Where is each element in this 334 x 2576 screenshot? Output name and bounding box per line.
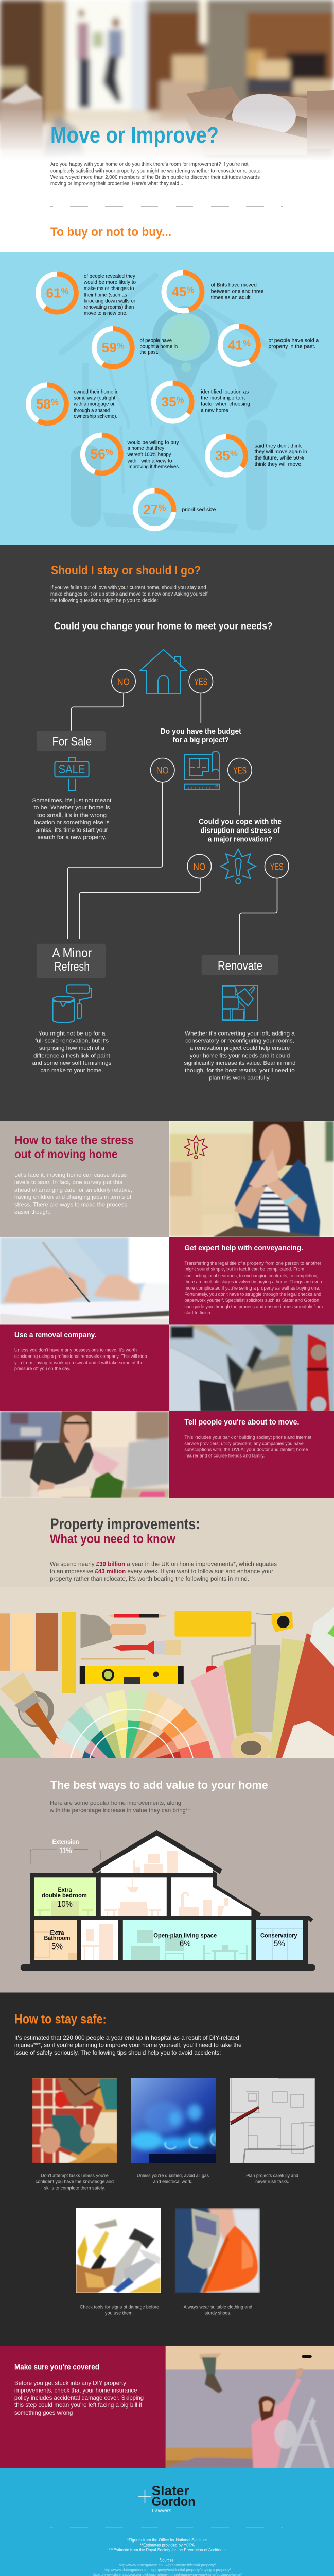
question 2: for a big project? xyxy=(173,736,229,744)
stat: 45%: times as an adult xyxy=(211,295,251,301)
safety intro text: injuries***, so if you're planning to improve your home yourself, you'll need to take the xyxy=(14,2042,242,2049)
renovate text xyxy=(184,1030,295,1081)
stat: 61%: % xyxy=(61,286,69,296)
scraper xyxy=(80,1614,146,1648)
footnotes xyxy=(109,2538,225,2562)
stress intro text: levels to soar. In fact, one survey put this xyxy=(14,1180,122,1186)
panel: get expert help: there are multiple stages involved in buying a home. Things are even xyxy=(184,1279,322,1285)
label: extra bathroom xyxy=(44,1930,70,1952)
label: extra bathroom: 5% xyxy=(51,1942,63,1952)
intro paragraph: completely satisfied with your property, you might be wondering whether to renovate or relocate. xyxy=(50,168,262,174)
for sale text: to be. Whether your home is xyxy=(34,805,110,811)
stress intro text: easier though. xyxy=(14,1209,50,1215)
for sale text: amiss, it's time to start your xyxy=(36,827,108,833)
stat: 61%: would be more likely to xyxy=(83,280,136,285)
furniture silhouettes xyxy=(82,1851,228,1960)
panel: use a removal company: you from having to work up a sweat and it will take some of the xyxy=(14,1360,143,1366)
button: yes 1 xyxy=(189,669,213,693)
value intro text: with the percentage increase in value they can bring**. xyxy=(49,1807,192,1814)
result: a minor refresh: Refresh xyxy=(54,960,90,974)
intro paragraph: We surveyed more than 2,000 members of the British public to discover their attitudes towards xyxy=(50,174,260,180)
label: extra double bedroom: 10% xyxy=(57,1899,73,1909)
photo: row of vans xyxy=(169,1324,334,1412)
stat: 59%: % xyxy=(117,341,125,350)
extension bracket and label xyxy=(30,1838,100,1871)
result: for sale xyxy=(37,731,106,751)
panel: use a removal company: Unless you don't have many possessions to move, it's worth xyxy=(14,1348,137,1353)
result: for sale: For Sale xyxy=(52,735,92,749)
panel: tell people you're about to move: subscriptions with; the DVLA; your doctor and dentist; home xyxy=(184,1447,308,1453)
icon: blueprint xyxy=(185,751,219,790)
photo: man with router xyxy=(32,2078,117,2163)
label: conservatory: Conservatory xyxy=(260,1933,297,1939)
background tools illustration xyxy=(62,276,283,534)
photo: leg through ceiling xyxy=(166,2346,334,2468)
ground floor small room xyxy=(81,1920,118,1960)
icon: stress star xyxy=(221,849,256,884)
conservatory room xyxy=(256,1920,303,1960)
stat: 35% location: % xyxy=(177,395,184,405)
result: a minor refresh xyxy=(37,944,106,978)
renovate text: though, for the best results, you'll need to xyxy=(185,1067,295,1074)
stat: 35% location: 35 xyxy=(162,394,177,410)
stat: 59%: bought a home in xyxy=(140,344,178,349)
label: extra double bedroom: double bedroom xyxy=(42,1893,87,1899)
stat: 56%: would be willing to buy xyxy=(127,439,179,445)
panel: property improvements xyxy=(0,1498,334,1758)
panel: get expert help: can guide you through the process and ensure it runs smoothly from xyxy=(184,1304,323,1310)
label: extra bathroom: Bathroom xyxy=(44,1935,70,1941)
panel: make sure you're covered: this step could mean you're left facing a big bill if xyxy=(14,2401,143,2409)
panel: make sure you're covered: policy includes accidental damage cover. Skipping xyxy=(14,2394,144,2401)
caption: plan projects: never rush tasks. xyxy=(255,2179,289,2184)
icon: renovating wall xyxy=(222,986,257,1020)
safety intro text: issue of safety seriously. The following tips should help you to avoid accidents: xyxy=(14,2049,221,2056)
stat: 27%: prioritised size. xyxy=(182,507,217,513)
stat: 41%: of people have sold a xyxy=(269,338,319,343)
stat: 35% move again: think they will move. xyxy=(255,462,303,467)
panel: get expert help: Fortunately, you don't have to struggle through the legal checks and xyxy=(184,1292,321,1297)
panel: best ways to add value xyxy=(0,1758,334,1993)
stat: 35% move again: they will move again in xyxy=(255,449,307,455)
button: yes 3: YES xyxy=(270,861,284,872)
safety intro text xyxy=(14,2034,242,2056)
label: extra bathroom: Extra xyxy=(50,1930,64,1936)
footnotes: **Estimates provided by YOPA xyxy=(140,2543,195,2548)
improvement spend text xyxy=(50,1562,277,1582)
minor refresh text: difference a fresh lick of paint xyxy=(33,1053,110,1059)
stat: 27%: 27 xyxy=(143,502,158,517)
stat: 45% xyxy=(164,273,264,311)
minor refresh text: surprising how much of a xyxy=(39,1045,105,1052)
icon: crimson stress star xyxy=(184,1136,208,1159)
colour samples xyxy=(0,1613,58,1671)
question 3: Could you cope with the xyxy=(199,817,282,826)
stat: 59%: 59 xyxy=(102,340,117,355)
source list xyxy=(50,2563,285,2576)
panel: make sure you're covered: Before you get stuck into any DIY property xyxy=(14,2379,126,2386)
stat: 56%: % xyxy=(106,447,113,457)
extra bathroom room xyxy=(34,1920,77,1960)
value intro text: Here are some popular home improvements, along xyxy=(50,1800,181,1806)
stress intro text: having children and changing jobs in terms of xyxy=(14,1194,132,1200)
stat: 58%: ownership scheme). xyxy=(74,414,117,419)
panel: use a removal company: pressure off you on the day. xyxy=(14,1366,71,1372)
logo: Slater and Gordon Lawyers: Lawyers xyxy=(152,2508,171,2514)
heading: The best ways to add value to your home xyxy=(50,1778,268,1791)
extension bracket and label: Extension xyxy=(52,1838,79,1845)
stat: 56% xyxy=(83,435,180,473)
caption: gas and electrical xyxy=(137,2173,209,2184)
for sale text xyxy=(32,798,111,841)
house cross-section diagram xyxy=(21,1831,315,1971)
improvement spend text: property rather than relocate, it's worth bearing the following points in mind. xyxy=(50,1576,249,1582)
paint brush xyxy=(112,1640,181,1655)
stat: 41% xyxy=(220,326,319,364)
footnotes: *Figures from the Office for National Statistics xyxy=(127,2538,207,2543)
button: no 1: NO xyxy=(117,677,130,687)
question 2 xyxy=(161,727,241,744)
photo: floor plan with pencil xyxy=(230,2078,315,2163)
intro paragraph: Are you happy with your home or do you think there's room for improvement? If you're not xyxy=(50,161,249,167)
stat: 41%: property in the past. xyxy=(269,344,315,349)
for sale text: Sometimes, it's just not meant xyxy=(32,798,111,804)
stat: 61%: of people revealed they xyxy=(84,274,135,279)
caption: suitable clothing xyxy=(184,2304,252,2316)
panel: tell people you're about to move: Tell people you're about to move. xyxy=(184,1418,299,1427)
for sale text: too small, it's in the wrong xyxy=(37,812,107,819)
improvement spend text: We spend nearly £30 billion a year in the UK on home improvements*, which equates xyxy=(50,1562,277,1568)
intro paragraph xyxy=(50,161,262,187)
panel: make sure you're covered: improvements, check that your home insurance xyxy=(14,2387,137,2394)
button: yes 1: YES xyxy=(194,677,207,687)
label: extra double bedroom: Extra xyxy=(58,1887,72,1893)
panel: tell people you're about to move: This includes your bank or building society; phone and internet xyxy=(184,1435,311,1440)
stat: 58%: owned their home in xyxy=(74,389,118,395)
panel: tell people you're about to move: service providers; utility providers; any companies you have xyxy=(184,1441,304,1447)
caption: knowledge and skills: skills to complete them safely. xyxy=(44,2185,105,2191)
panel: get expert help xyxy=(169,1237,334,1324)
safety intro text: It's estimated that 220,000 people a year end up in hospital as a result of DIY-related xyxy=(14,2034,239,2041)
panel: get expert help: Transferring the legal title of a property from one person to another xyxy=(184,1261,322,1266)
house structure xyxy=(21,1831,315,1971)
button: no 2 xyxy=(151,758,174,782)
moving box, left xyxy=(0,84,43,149)
subheading: what you need to know: What you need to know xyxy=(50,1532,175,1546)
caption: plan projects: Plan projects carefully and xyxy=(246,2173,298,2178)
stat: 61%: move to a new one. xyxy=(84,311,127,316)
logo: Slater and Gordon Lawyers xyxy=(138,2484,196,2514)
minor refresh text: You might not be up for a xyxy=(38,1030,106,1037)
intro paragraph: moving or improving their properties. Here's what they said... xyxy=(50,180,183,187)
open-plan room xyxy=(123,1920,251,1960)
stat: 61%: make major changes to xyxy=(84,286,134,292)
caption: gas and electrical: and electrical work. xyxy=(153,2179,192,2184)
caption: gas and electrical: Unless you're qualified, avoid all gas xyxy=(137,2173,209,2178)
icon: house xyxy=(140,650,186,694)
caption: knowledge and skills: Don't attempt tasks unless you're xyxy=(41,2173,109,2178)
renovate text: plan this work carefully. xyxy=(209,1075,271,1081)
button: yes 3 xyxy=(265,854,289,878)
stat: 35% location: identified location as xyxy=(201,389,249,395)
photo: assorted tools xyxy=(76,2208,161,2293)
stat: 45%: 45 xyxy=(171,284,186,299)
label: open-plan living space: Open-plan living space xyxy=(153,1933,217,1939)
panel: tell people you're about to move xyxy=(169,1411,334,1498)
logo: Slater and Gordon Lawyers: Slater xyxy=(152,2484,189,2498)
stress intro text: ahead of arranging care for an elderly relative, xyxy=(14,1187,132,1193)
minor refresh text: full-scale renovation, but it's xyxy=(35,1038,109,1044)
panel: get expert help: paperwork yourself. Specialist solicitors such as Slater and Gordon xyxy=(184,1298,319,1303)
stat: 45%: between one and three xyxy=(211,289,264,295)
panel: get expert help: start to finish. xyxy=(184,1310,212,1316)
label: extra double bedroom xyxy=(42,1887,87,1909)
result: a minor refresh: A Minor xyxy=(52,946,92,960)
stat: 45%: of Brits have moved xyxy=(211,283,257,289)
panel: make sure you're covered: something goes wrong xyxy=(14,2409,73,2416)
photo: hand signing document xyxy=(0,1237,169,1325)
stat: 61%: their home (such as xyxy=(84,292,127,298)
colour fan deck xyxy=(50,1689,213,1758)
stat: 35% move again: said they don't think xyxy=(255,443,302,449)
stat: 35% move again: 35 xyxy=(215,448,230,463)
title: Move or Improve? xyxy=(50,123,219,148)
result: renovate xyxy=(202,955,278,975)
result: renovate: Renovate xyxy=(218,959,262,973)
caption: knowledge and skills xyxy=(36,2173,114,2191)
footnotes: ***Estimate from the Royal Society for the Prevention of Accidents xyxy=(109,2548,225,2552)
stat: 58%: 58 xyxy=(36,396,51,412)
panel: tell people you're about to move: insurer and of course friends and family. xyxy=(184,1453,265,1459)
renovate text: Whether it's converting your loft, adding a xyxy=(185,1030,295,1037)
photo: DIY tools on a table xyxy=(0,1607,334,1758)
panel: use a removal company: Use a removal company. xyxy=(14,1331,96,1340)
stat: 59% xyxy=(94,329,178,367)
button: no 3: NO xyxy=(193,861,205,872)
stat: 35% move again: the future, while 50% xyxy=(255,455,304,461)
for sale text: search for a new property. xyxy=(37,835,106,841)
section intro text xyxy=(50,584,208,604)
caption: check tools xyxy=(80,2304,159,2316)
heading: property improvements: Property improvements: xyxy=(50,1516,200,1533)
stat: 56%: improving it themselves. xyxy=(128,464,180,470)
heading: to buy or not to buy: To buy or not to buy... xyxy=(50,225,171,239)
button: no 3 xyxy=(187,854,212,878)
question 3: disruption and stress of xyxy=(201,826,280,835)
caption: knowledge and skills: confident you have the knowledge and xyxy=(36,2179,114,2184)
wallpaper samples xyxy=(190,1607,334,1764)
panel: get expert help: conducting local searches, to exchanging contracts, to completion, xyxy=(184,1273,318,1279)
renovate text: a renovation project could help ensure xyxy=(190,1045,290,1052)
panel: how to take the stress out of moving home xyxy=(0,1121,334,1498)
caption: plan projects xyxy=(246,2173,298,2184)
stat: 61% xyxy=(38,274,136,316)
stat: 45%: % xyxy=(186,285,195,295)
panel: get expert help: might sound simple, but in fact it can be complicated. From xyxy=(184,1267,304,1273)
spirit level xyxy=(80,1666,184,1684)
stat: 56%: with - with a view to xyxy=(127,458,172,464)
button: no 2: NO xyxy=(156,766,169,776)
panel: should I stay or should I go xyxy=(0,545,334,1121)
panel: make sure you're covered xyxy=(0,2346,334,2468)
stat: 35% location xyxy=(154,383,250,421)
stat: 58%: with a mortgage or xyxy=(73,402,115,407)
panel: get expert help: more complicated if you're selling a property as well as buying one. xyxy=(184,1285,320,1291)
tape measure xyxy=(256,1611,293,1632)
value intro text xyxy=(49,1800,192,1814)
label: open-plan living space xyxy=(153,1933,217,1948)
stat: 35% location: a new home xyxy=(201,408,228,413)
for sale text: location or something else is xyxy=(34,820,110,826)
living room xyxy=(101,1877,167,1916)
stat: 61%: 61 xyxy=(46,285,61,301)
panel: survey statistics xyxy=(0,252,334,545)
stat: 41%: % xyxy=(243,338,251,348)
stat: 56%: 56 xyxy=(91,446,106,462)
photo: stressed woman with boxes xyxy=(169,1121,334,1237)
question 3: a major renovation? xyxy=(208,835,272,844)
section intro text: the following questions might help you to decide: xyxy=(50,598,158,604)
heading: Should I stay or should I go? xyxy=(51,564,201,578)
heading: out of moving home xyxy=(14,1147,118,1161)
footnotes: Sources: xyxy=(160,2557,175,2562)
button: yes 2: YES xyxy=(233,766,247,776)
stat: 58%: % xyxy=(51,397,59,407)
minor refresh text xyxy=(32,1030,112,1074)
panel: how to stay safe xyxy=(0,1993,334,2346)
panel: use a removal company xyxy=(0,1324,169,1411)
stat: 59%: of people have xyxy=(140,338,172,343)
section intro text: If you've fallen out of love with your current home, should you stay and xyxy=(50,584,206,590)
heading xyxy=(14,1133,134,1161)
heading: How to take the stress xyxy=(14,1133,134,1147)
improvement spend text: to an impressive £43 million every week. If you want to follow suit and enhance your xyxy=(50,1569,273,1575)
flow connector lines xyxy=(68,693,277,955)
label: conservatory xyxy=(260,1933,297,1948)
stat: 58%: some way (outright, xyxy=(74,395,117,401)
button: no 1 xyxy=(112,669,135,693)
heading: How to stay safe: xyxy=(14,2012,107,2027)
caption: suitable clothing: Always wear suitable clothing and xyxy=(184,2304,252,2310)
label: conservatory: 5% xyxy=(274,1939,285,1948)
logo: Slater and Gordon Lawyers: Gordon xyxy=(152,2495,196,2509)
stat: 35% location: the most important xyxy=(201,395,245,401)
stat: 56%: weren't 100% happy xyxy=(127,452,171,457)
paint roller xyxy=(174,1611,256,1673)
section intro text: make changes to it or up sticks and move to a new one? Asking yourself xyxy=(50,591,208,597)
question 2: Do you have the budget xyxy=(161,727,241,736)
stat: 35% move again: % xyxy=(230,449,238,459)
source list: http://www.slatergordon.co.uk/property/residential-property/buying-a-property/ xyxy=(104,2567,231,2572)
panel: get expert help: Get expert help with conveyancing. xyxy=(184,1244,303,1252)
photo: gas flame xyxy=(130,2078,221,2164)
caption: check tools: Check tools for signs of damage before xyxy=(80,2304,159,2310)
stress intro text: stress. There are ways to make the process xyxy=(14,1202,128,1208)
panel: use a removal company: considering using a professional removals company. This will stop xyxy=(14,1354,147,1359)
icon: paint pot and roller xyxy=(53,985,92,1022)
stat: 27%: % xyxy=(158,503,166,513)
extension bracket and label: 11% xyxy=(60,1845,72,1855)
stress intro text: Let's face it, moving home can cause stress xyxy=(14,1172,127,1178)
moving box with bubble wrap xyxy=(183,86,334,155)
extra double bedroom room xyxy=(34,1877,96,1916)
attic room xyxy=(101,1836,213,1873)
stat: 27% xyxy=(136,490,217,529)
stat: 59%: the past. xyxy=(140,350,159,355)
stat: 58%: through a shared xyxy=(74,408,110,413)
icon: sale sign: SALE xyxy=(59,762,85,776)
stat: 35% move again xyxy=(207,437,307,475)
photo: hard hat and gloves xyxy=(175,2208,260,2293)
stat: 61%: knocking down walls or xyxy=(84,298,136,304)
icon: sale sign xyxy=(55,757,89,790)
label: open-plan living space: 6% xyxy=(180,1939,191,1948)
renovate text: significantly increase its value. Bear in mind xyxy=(184,1060,295,1066)
question 1: Could you change your home to meet your needs? xyxy=(54,621,273,632)
renovate text: conservatory or reconfiguring your rooms, xyxy=(185,1038,294,1044)
caption: check tools: you use them. xyxy=(105,2310,134,2316)
button: yes 2 xyxy=(228,758,252,782)
stat: 58% xyxy=(28,385,118,423)
stat: 41%: 41 xyxy=(228,337,243,352)
stress intro text xyxy=(14,1172,132,1215)
pencil xyxy=(108,1614,167,1618)
stat: 35% location: factor when choosing xyxy=(201,402,250,407)
upstairs bathroom xyxy=(171,1877,251,1916)
panel: footer xyxy=(0,2468,334,2576)
stat: 61%: renovating rooms) than xyxy=(84,304,134,310)
stat: 56%: a home that they xyxy=(128,446,164,451)
panel: make sure you're covered: Make sure you're covered xyxy=(14,2363,99,2372)
tin and brush xyxy=(0,1673,59,1758)
renovate text: your home fits your needs and it could xyxy=(190,1053,290,1059)
question 3 xyxy=(199,817,282,844)
panel: hero photo xyxy=(0,0,334,162)
minor refresh text: can make to your home. xyxy=(40,1067,103,1074)
caption: suitable clothing: sturdy shoes. xyxy=(205,2310,231,2316)
source list: http://www.slatergordon.co.uk/property/residential-property/ xyxy=(119,2563,216,2567)
minor refresh text: and some new soft furnishings xyxy=(32,1060,112,1066)
photo: woman on the phone xyxy=(0,1411,169,1498)
